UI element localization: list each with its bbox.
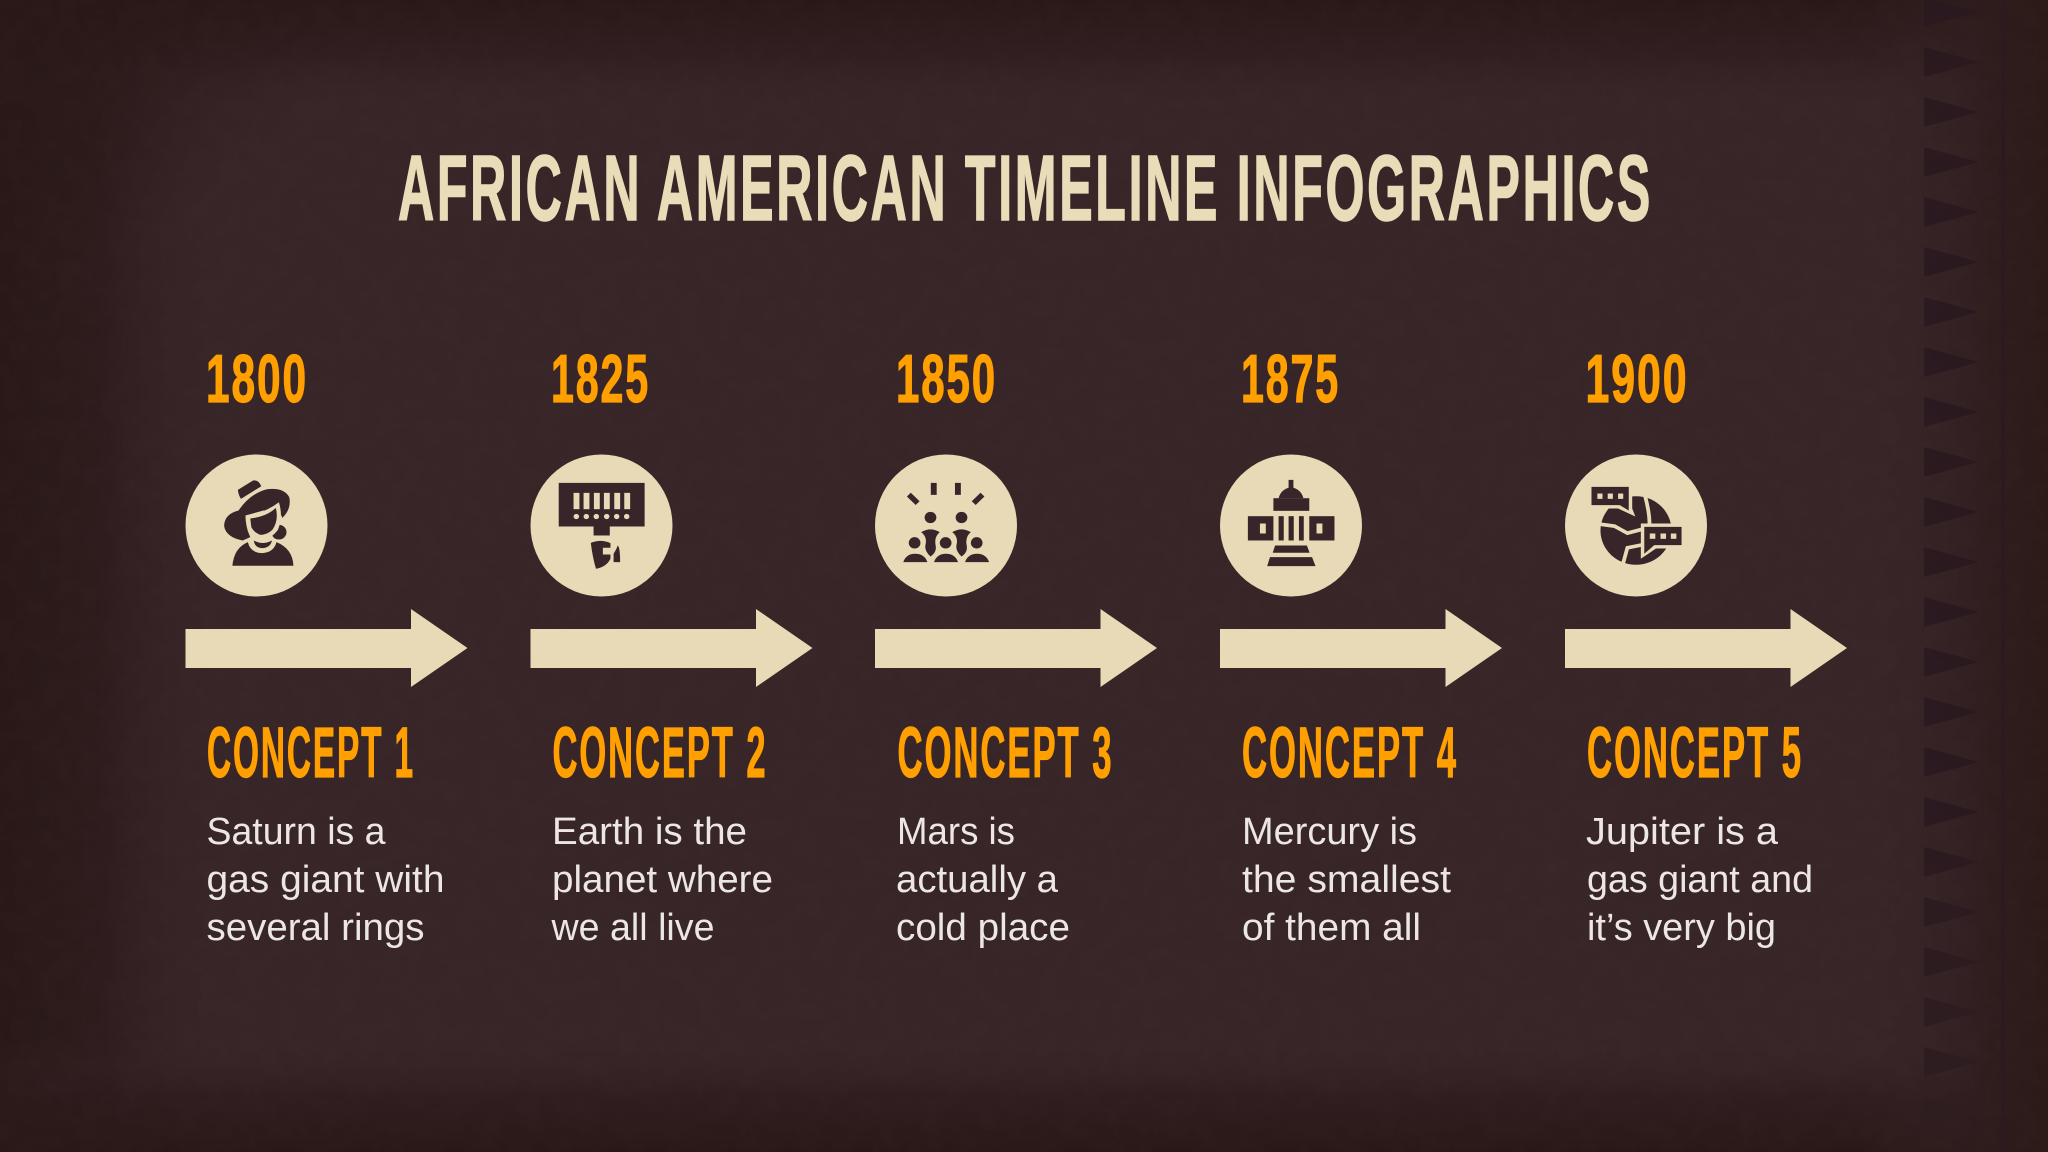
year 1825: 1825 [551,341,650,417]
panel: 1850 concept 3: CONCEPT 3 [898,714,1114,793]
text: concept 5 description: it’s very big [1587,907,1776,949]
text: concept 2 description [551,811,773,949]
panel: 1875 concept 4 [1220,341,1502,949]
text: concept 3 description: Mars is [897,811,1015,853]
text: concept 2 description: we all live [551,907,714,949]
text: concept 4 description: Mercury is [1242,811,1417,853]
text: concept 1 description: gas giant with [206,859,444,901]
text: concept 4 description: of them all [1242,907,1421,949]
icon: globe with speech bubbles [1565,454,1707,596]
arrow [875,609,1157,687]
year 1850: 1850 [896,341,997,417]
panel: 1800 concept 1: CONCEPT 1 [207,714,415,793]
panel: 1825 concept 2 [530,341,812,949]
panel: 1800 concept 1 [186,341,468,949]
year 1900: 1900 [1586,341,1688,417]
text: concept 4 description: the smallest [1242,859,1451,901]
text: concept 3 description: actually a [896,859,1059,901]
panel: 1875 concept 4: CONCEPT 4 [1242,714,1458,793]
text: concept 5 description: gas giant and [1587,859,1813,901]
icon: capitol building [1220,454,1362,596]
arrow [530,609,812,687]
panel: 1850 concept 3 [875,341,1157,949]
text: concept 3 description [896,811,1070,949]
text: concept 1 description [206,811,444,949]
arrow [1220,609,1502,687]
decorative border: triangle strip [1924,0,1979,1127]
text: concept 1 description: several rings [206,907,424,949]
text: concept 5 description: Jupiter is a [1586,811,1779,853]
panel: 1900 concept 5: CONCEPT 5 [1587,714,1803,793]
text: concept 4 description [1242,811,1451,949]
panel: 1900 concept 5 [1565,341,1847,949]
arrow [186,609,468,687]
year 1800: 1800 [206,341,308,417]
arrow [1565,609,1847,687]
text: concept 2 description: Earth is the [552,811,747,853]
icon: protest sign in hand [530,454,672,596]
text: concept 3 description: cold place [896,907,1070,949]
panel: 1825 concept 2: CONCEPT 2 [552,714,768,793]
icon: woman with hat [186,454,328,596]
icon: crowd of people [875,454,1017,596]
text: concept 1 description: Saturn is a [206,811,386,853]
year 1875: 1875 [1241,341,1340,417]
text: concept 2 description: planet where [552,859,773,901]
text: concept 5 description [1586,811,1813,949]
